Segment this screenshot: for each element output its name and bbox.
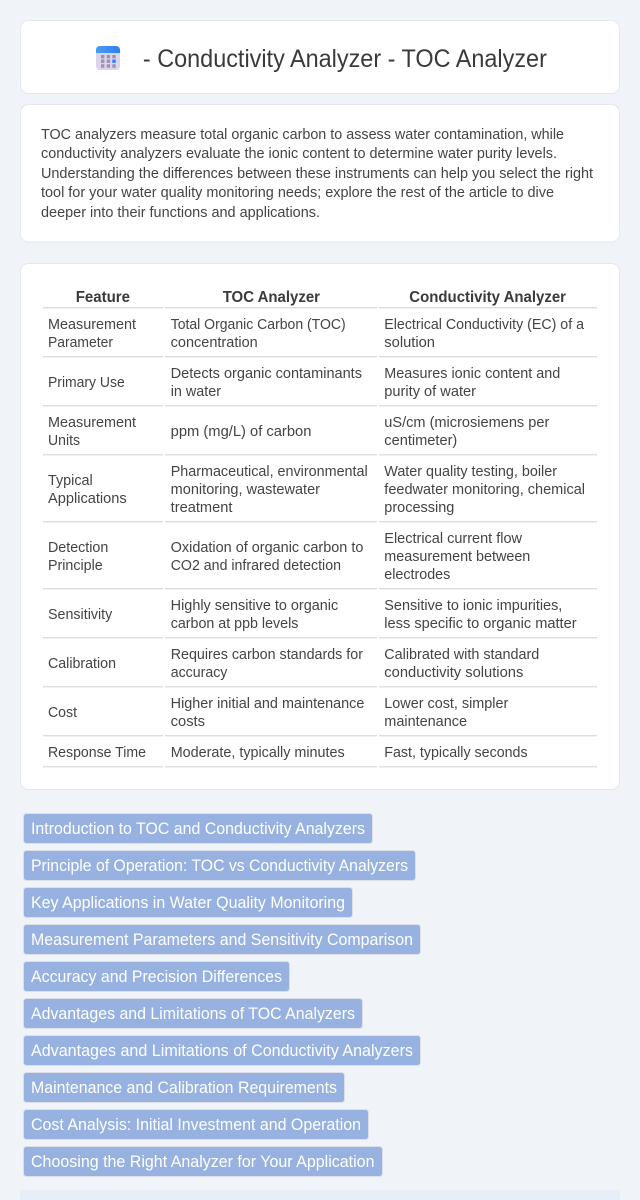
- link button: principle of operation: Principle of Operation: TOC vs Conductivity Analyzers: [31, 857, 408, 875]
- row: cost: Higher initial and maintenance: [171, 696, 364, 712]
- row: typical applications: Applications: [48, 491, 127, 507]
- table header row: Conductivity Analyzer: [409, 289, 566, 306]
- text block: intro paragraph: tool for your water quality monitoring needs; explore the rest of the article to dive: [41, 185, 554, 201]
- row: typical applications: treatment: [171, 500, 232, 516]
- row: primary use: Primary Use: [48, 375, 125, 391]
- row: measurement units: Measurement: [48, 415, 136, 431]
- row: measurement parameter: Total Organic Carbon (TOC): [171, 317, 346, 333]
- row: typical applications: Pharmaceutical, environmental: [171, 464, 368, 480]
- row: measurement parameter: Parameter: [48, 335, 113, 351]
- panel: title header: [20, 20, 620, 94]
- icon: calendar: [96, 46, 120, 70]
- row: cost: [48, 696, 508, 730]
- link button: measurement parameters: [24, 924, 420, 954]
- row: calibration: [48, 647, 539, 681]
- row: measurement units: Units: [48, 433, 80, 449]
- row: response time: Response Time: [48, 745, 146, 761]
- row: typical applications: [48, 464, 585, 516]
- row: detection principle: Oxidation of organic carbon to: [171, 540, 363, 556]
- link button: maintenance and calibration: [24, 1072, 344, 1102]
- panel: footer strip: [20, 1190, 620, 1200]
- row: calibration: Requires carbon standards for: [171, 647, 363, 663]
- text block: intro paragraph: conductivity analyzers evaluate the ionic content to determine water purity levels.: [41, 146, 557, 162]
- row: measurement parameter: [48, 317, 584, 351]
- table header row: TOC Analyzer: [223, 289, 320, 306]
- row: measurement units: uS/cm (microsiemens per: [384, 415, 550, 431]
- link button: maintenance and calibration: Maintenance and Calibration Requirements: [31, 1079, 337, 1097]
- link button: accuracy and precision: Accuracy and Precision Differences: [31, 968, 282, 986]
- row: measurement parameter: concentration: [171, 335, 258, 351]
- row: measurement parameter: Measurement: [48, 317, 136, 333]
- row: sensitivity: Sensitive to ionic impurities,: [384, 598, 562, 614]
- row: primary use: [48, 366, 560, 400]
- row: primary use: purity of water: [384, 384, 476, 400]
- row: typical applications: processing: [384, 500, 454, 516]
- row: calibration: accuracy: [171, 665, 228, 681]
- link button: choosing the right analyzer: Choosing the Right Analyzer for Your Application: [31, 1153, 374, 1171]
- row: detection principle: [48, 531, 530, 583]
- row: response time: [48, 745, 528, 761]
- row: measurement parameter: Electrical Conductivity (EC) of a: [384, 317, 584, 333]
- row: calibration: conductivity solutions: [384, 665, 523, 681]
- link button: TOC advantages: [24, 998, 362, 1028]
- row: detection principle: Principle: [48, 558, 103, 574]
- row: calibration: Calibration: [48, 656, 116, 672]
- row: detection principle: electrodes: [384, 567, 450, 583]
- panel: introduction: [20, 104, 620, 242]
- row: typical applications: Water quality testing, boiler: [384, 464, 557, 480]
- link button: measurement parameters: Measurement Parameters and Sensitivity Comparison: [31, 931, 413, 949]
- row: sensitivity: [48, 598, 577, 632]
- row: primary use: Measures ionic content and: [384, 366, 560, 382]
- row: typical applications: Typical: [48, 473, 93, 489]
- link button: accuracy and precision: [24, 962, 290, 992]
- row: typical applications: feedwater monitoring, chemical: [384, 482, 585, 498]
- link button: key applications: Key Applications in Water Quality Monitoring: [31, 894, 345, 912]
- row: response time: Moderate, typically minutes: [171, 745, 345, 761]
- row: detection principle: CO2 and infrared detection: [171, 558, 341, 574]
- table header row: [76, 289, 566, 306]
- row: cost: maintenance: [384, 714, 467, 730]
- row: primary use: in water: [171, 384, 221, 400]
- link button: conductivity advantages: Advantages and Limitations of Conductivity Analyzers: [31, 1042, 413, 1060]
- row: cost: Lower cost, simpler: [384, 696, 508, 712]
- link button: introduction: [24, 814, 372, 844]
- row: primary use: Detects organic contaminants: [171, 366, 362, 382]
- row: detection principle: Electrical current flow: [384, 531, 523, 547]
- title: - Conductivity Analyzer - TOC Analyzer: [143, 45, 547, 73]
- row: detection principle: measurement between: [384, 549, 530, 565]
- link list: article sections: [24, 814, 420, 1176]
- row: response time: Fast, typically seconds: [384, 745, 528, 761]
- link button: introduction: Introduction to TOC and Conductivity Analyzers: [31, 820, 365, 838]
- row: measurement parameter: solution: [384, 335, 435, 351]
- link button: cost analysis: Cost Analysis: Initial Investment and Operation: [31, 1116, 361, 1134]
- row: sensitivity: less specific to organic matter: [384, 616, 577, 632]
- text block: intro paragraph: deeper into their functions and applications.: [41, 205, 320, 221]
- link button: cost analysis: [24, 1110, 368, 1140]
- row: typical applications: monitoring, wastewater: [171, 482, 320, 498]
- row: detection principle: Detection: [48, 540, 108, 556]
- text block: intro paragraph: TOC analyzers measure total organic carbon to assess water contamination, while: [41, 127, 564, 143]
- link button: principle of operation: [24, 850, 416, 880]
- link button: TOC advantages: Advantages and Limitations of TOC Analyzers: [31, 1005, 355, 1023]
- text block: intro paragraph: [41, 127, 593, 221]
- row: measurement units: centimeter): [384, 433, 457, 449]
- table header row: Feature: [76, 289, 130, 306]
- link button: choosing the right analyzer: [24, 1146, 382, 1176]
- row: sensitivity: carbon at ppb levels: [171, 616, 298, 632]
- panel: comparison table: [20, 264, 620, 790]
- row: sensitivity: Highly sensitive to organic: [171, 598, 338, 614]
- row: cost: Cost: [48, 705, 77, 721]
- row: calibration: Calibrated with standard: [384, 647, 539, 663]
- link button: key applications: [24, 888, 352, 918]
- text block: intro paragraph: Understanding the differences between these instruments can help you select the right: [41, 166, 593, 182]
- row: measurement units: [48, 415, 550, 449]
- row: sensitivity: Sensitivity: [48, 607, 113, 623]
- link button: conductivity advantages: [24, 1036, 420, 1066]
- row: cost: costs: [171, 714, 205, 730]
- row: measurement units: ppm (mg/L) of carbon: [171, 424, 311, 440]
